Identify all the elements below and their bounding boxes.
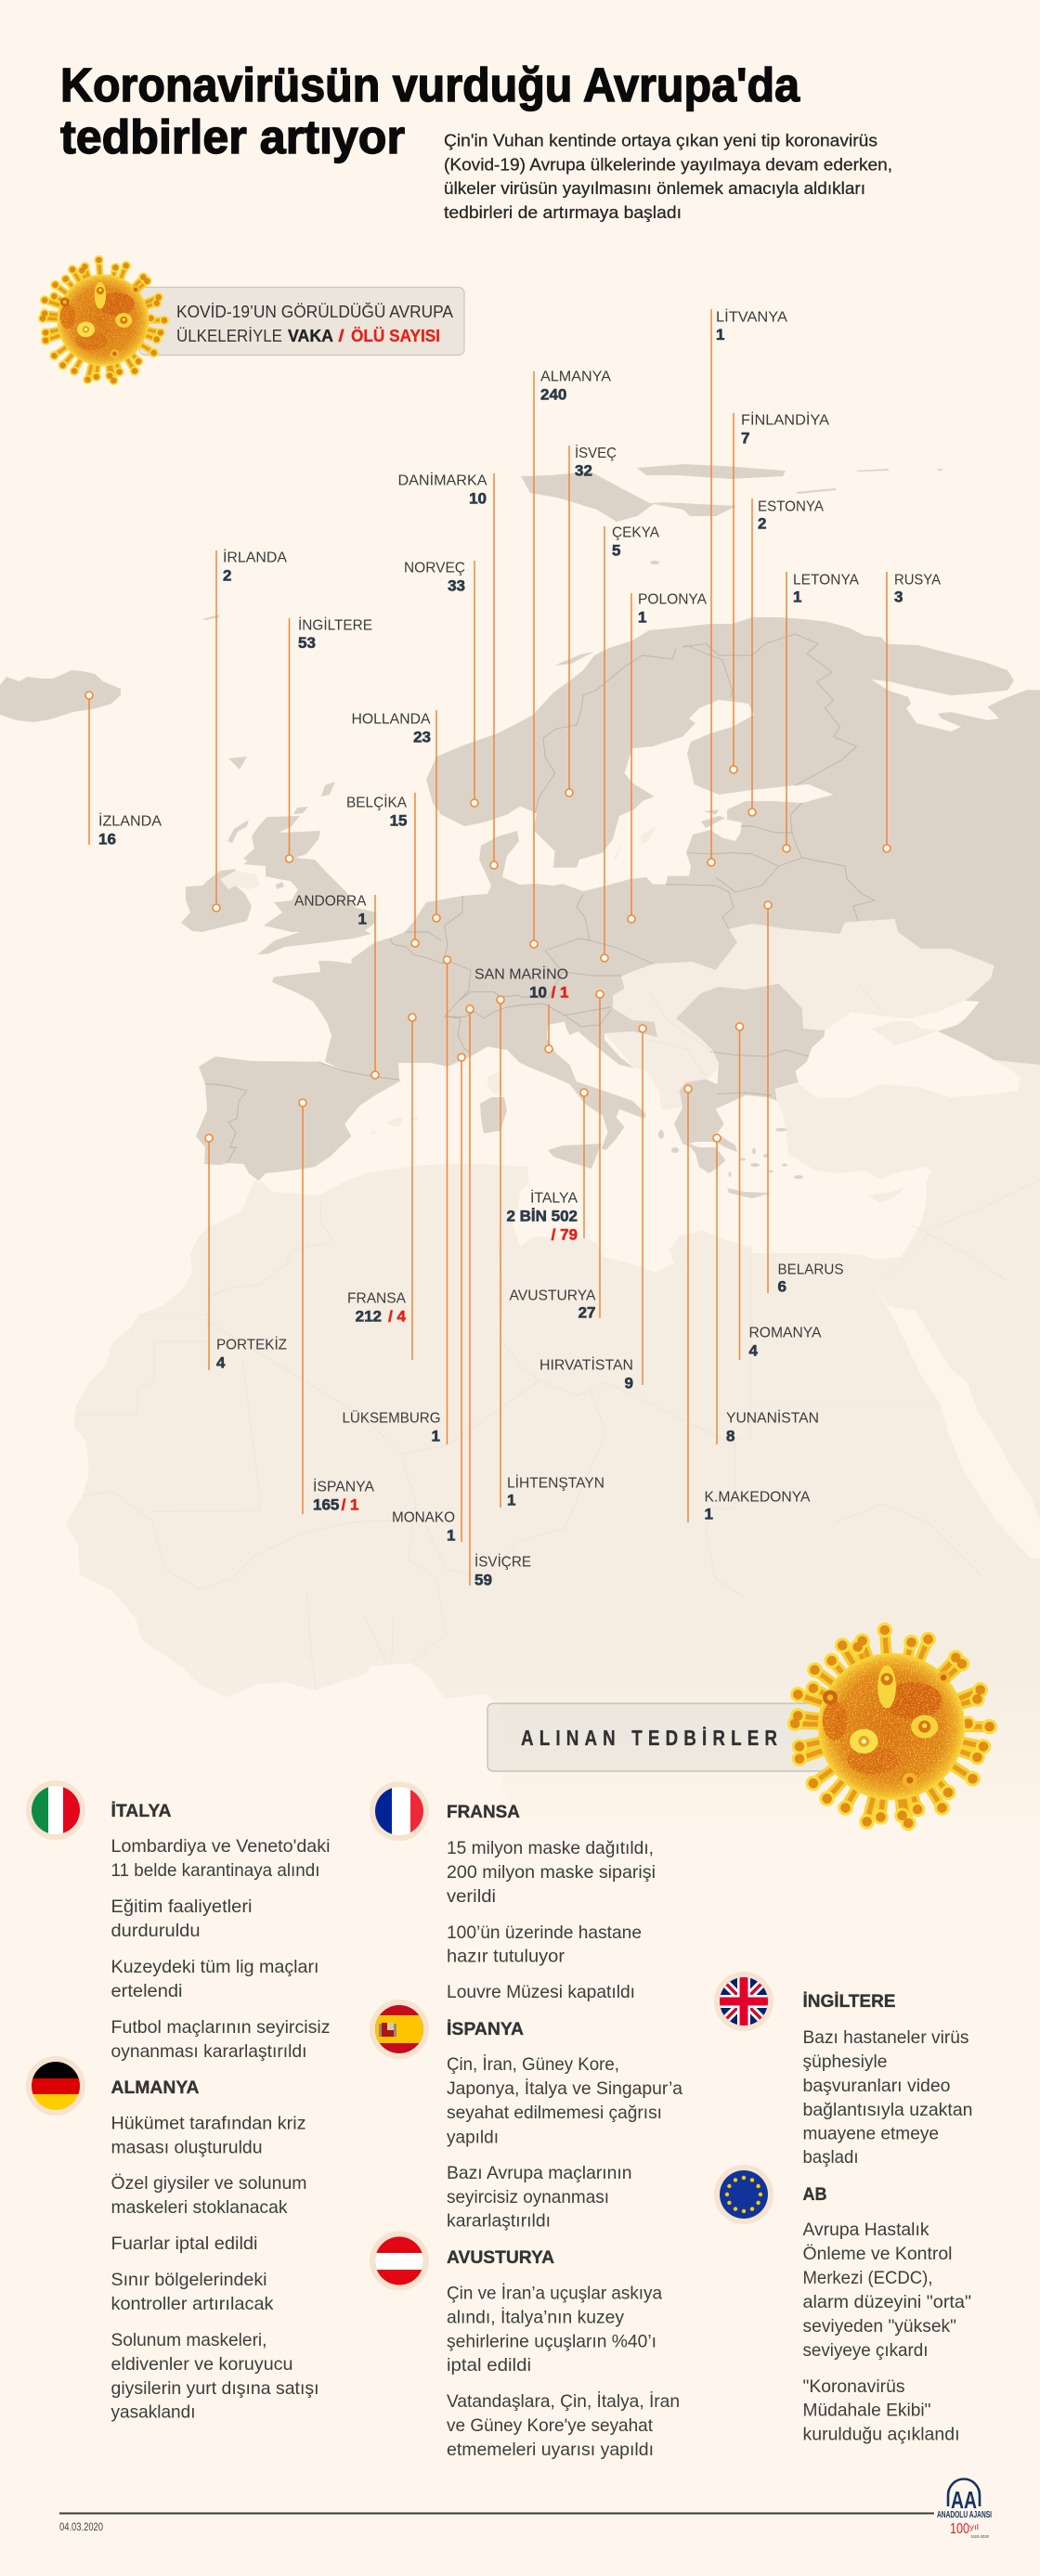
- country: San Marino: 10: [529, 984, 547, 1001]
- country: Çekya: ÇEKYA: [612, 525, 660, 540]
- country: Lüksemburg: LÜKSEMBURG: [342, 1409, 440, 1426]
- country: Çekya: [601, 525, 660, 962]
- measures: Germany: ALMANYA: [111, 2078, 200, 2098]
- measures: Austria: alındı, İtalya’nın kuzey: [447, 2306, 624, 2328]
- country: Andorra: [294, 893, 379, 1079]
- sea: Red Sea: [872, 1280, 1040, 1559]
- country: Avusturya: [509, 990, 604, 1322]
- map of Europe and North Africa: [0, 464, 1040, 1819]
- country: Yunanistan: [713, 1134, 819, 1444]
- country: Polonya: 1: [638, 609, 646, 626]
- measures: Spain: Bazı Avrupa maçlarının: [447, 2163, 631, 2183]
- panel: map legend: VAKA: [288, 326, 333, 345]
- measures: Austria: [447, 2248, 680, 2460]
- country: Hollanda: [351, 710, 440, 922]
- measures: European Union: Merkezi (ECDC),: [802, 2268, 932, 2288]
- country: İsviçre: [466, 1005, 531, 1589]
- panel: map legend: ÖLÜ SAYISI: [351, 326, 440, 345]
- country: Belarus: [764, 901, 843, 1296]
- country: İzlanda: 16: [98, 830, 116, 848]
- panel: map legend: ÜLKELERİYLE: [176, 326, 282, 345]
- country: San Marino: SAN MARİNO: [474, 965, 568, 982]
- country: Finlandiya: [730, 412, 830, 773]
- measures: United Kingdom: başladı: [802, 2147, 858, 2168]
- measures: Austria: ve Güney Kore'ye seyahat: [447, 2415, 654, 2436]
- intro text: tedbirleri de artırmaya başladı: [444, 202, 682, 222]
- measures: Germany: Özel giysiler ve solunum: [111, 2173, 306, 2194]
- country: Norveç: 33: [448, 577, 465, 594]
- measures: European Union: "Koronavirüs: [802, 2376, 905, 2397]
- country: İspanya: [299, 1099, 375, 1514]
- measures: Spain: Çin, İran, Güney Kore,: [447, 2053, 619, 2075]
- measures: Spain: seyircisiz oynanması: [447, 2187, 609, 2207]
- country: Andorra: 1: [358, 910, 367, 928]
- measures: Germany: Fuarlar iptal edildi: [111, 2233, 258, 2254]
- measures: Italy: ertelendi: [111, 1981, 182, 2001]
- measures: Austria: Çin ve İran’a uçuşlar askıya: [447, 2282, 662, 2304]
- measures: France: hazır tutuluyor: [447, 1946, 566, 1966]
- country: Danimarka: [397, 472, 498, 869]
- measures: United Kingdom: muayene etmeye: [802, 2124, 939, 2144]
- measures: France: 100’ün üzerinde hastane: [447, 1922, 642, 1943]
- measures: Germany: yasaklandı: [111, 2402, 195, 2423]
- measures: Spain: [447, 2020, 682, 2232]
- landmass: Crimea: [872, 1021, 940, 1045]
- measures: Germany: kontroller artırılacak: [111, 2294, 274, 2314]
- measures: Spain: seyahat edilmemesi çağrısı: [447, 2103, 662, 2123]
- country: Hırvatistan: 9: [625, 1374, 633, 1392]
- country: K.Makedonya: K.MAKEDONYA: [704, 1489, 811, 1506]
- intro text: ülkeler virüsün yayılmasını önlemek amacıyla aldıkları: [444, 178, 865, 198]
- country: Avusturya: 27: [578, 1303, 596, 1322]
- country: Estonya: [748, 498, 825, 816]
- country: Fransa: / 4: [388, 1307, 407, 1326]
- measures: Austria: Vatandaşlara, Çin, İtalya, İran: [447, 2390, 680, 2412]
- country: Rusya: 3: [894, 589, 903, 605]
- measures: Germany: giysilerin yurt dışına satışı: [111, 2378, 319, 2399]
- country: Litvanya: [708, 308, 788, 866]
- country: Almanya: 240: [540, 386, 566, 403]
- measures: Germany: eldivenler ve koruyucu: [111, 2354, 293, 2375]
- country: Almanya: [530, 369, 612, 948]
- landmass: Iceland: [0, 670, 121, 722]
- country: Almanya: ALMANYA: [540, 369, 612, 384]
- country: Portekiz: PORTEKİZ: [216, 1337, 287, 1353]
- country: Estonya: 2: [758, 514, 766, 533]
- icon: virus top: [43, 260, 164, 381]
- intro text: Çin'in Vuhan kentinde ortaya çıkan yeni tip koronavirüs: [444, 130, 878, 150]
- measures: France: 15 milyon maske dağıtıldı,: [447, 1838, 654, 1858]
- intro text: [444, 130, 892, 222]
- country: Fransa: 212: [356, 1307, 382, 1326]
- country: Polonya: POLONYA: [638, 592, 708, 607]
- measures: Italy: Eğitim faaliyetleri: [111, 1896, 253, 1917]
- measures: Italy: oynanması kararlaştırıldı: [111, 2041, 306, 2062]
- measures: France: [447, 1803, 656, 2002]
- country: Lihtenştayn: [497, 996, 604, 1509]
- country: Lüksemburg: 1: [432, 1428, 440, 1444]
- measures: Spain: Japonya, İtalya ve Singapur’a: [447, 2078, 682, 2099]
- measures: Germany: Sınır bölgelerindeki: [111, 2270, 267, 2290]
- islands: light coloured: [370, 826, 906, 1203]
- measures: European Union: Müdahale Ekibi": [802, 2401, 931, 2421]
- measures: United Kingdom: Bazı hastaneler virüs: [802, 2027, 969, 2048]
- country: Belarus: BELARUS: [778, 1262, 843, 1277]
- measures: European Union: Önleme ve Kontrol: [802, 2244, 953, 2264]
- country: Çekya: 5: [612, 542, 620, 559]
- country: Finlandiya: 7: [741, 429, 749, 447]
- measures: United Kingdom: şüphesiyle: [802, 2052, 888, 2072]
- landmass: eastern Balkans and Greece: [674, 984, 826, 1173]
- country: K.Makedonya: 1: [704, 1506, 713, 1522]
- measures: European Union: AB: [802, 2185, 826, 2205]
- country: İsviçre: 59: [474, 1571, 492, 1589]
- country: Norveç: [404, 561, 478, 807]
- measures: Italy: durduruldu: [111, 1921, 201, 1941]
- country: Hırvatistan: [540, 1025, 646, 1392]
- icon: virus bottom: [795, 1630, 990, 1823]
- country: San Marino: [474, 965, 568, 1053]
- measures: Spain: İSPANYA: [447, 2020, 524, 2039]
- country: Lihtenştayn: LİHTENŞTAYN: [507, 1474, 604, 1491]
- logo: Anadolu Ajansı: yıl: [969, 2523, 979, 2531]
- panel: measures heading: [488, 1703, 831, 1771]
- panel: map legend: KOVİD-19’UN GÖRÜLDÜĞÜ AVRUPA: [176, 302, 454, 321]
- measures: European Union: seviyeye çıkardı: [802, 2340, 929, 2361]
- country: Monako: 1: [447, 1526, 455, 1545]
- landmass: Northern Ireland: [220, 871, 260, 889]
- country borders: Europe: [205, 634, 875, 1162]
- country: İspanya: 165: [313, 1496, 339, 1513]
- measures: France: FRANSA: [447, 1803, 520, 1822]
- logo: Anadolu Ajansı: 100: [950, 2521, 969, 2537]
- country: İsveç: 32: [575, 462, 592, 479]
- country: Litvanya: LİTVANYA: [716, 308, 788, 325]
- measures: United Kingdom: başvuranları video: [802, 2076, 951, 2096]
- measures: France: 200 milyon maske siparişi: [447, 1862, 656, 1883]
- country: İsveç: İSVEÇ: [575, 445, 617, 461]
- measures: Spain: kararlaştırıldı: [447, 2211, 551, 2232]
- measures: Italy: Lombardiya ve Veneto'daki: [111, 1836, 331, 1857]
- date: 04.03.2020: [59, 2520, 103, 2533]
- measures: Germany: Hükümet tarafından kriz: [111, 2113, 306, 2133]
- measures: United Kingdom: bağlantısıyla uzaktan: [802, 2100, 973, 2120]
- title: [60, 58, 800, 163]
- country: İzlanda: İZLANDA: [98, 813, 162, 830]
- country: İrlanda: [213, 550, 288, 912]
- country: Fransa: [347, 1014, 416, 1360]
- landmass: Africa and Middle East: [66, 1060, 1040, 1819]
- landmass: Iberian peninsula: [196, 1056, 401, 1181]
- country: İspanya: / 1: [342, 1496, 358, 1513]
- measures: United Kingdom: [802, 1992, 973, 2168]
- country: Portekiz: 4: [216, 1353, 226, 1372]
- flag: Spain: [370, 2000, 429, 2059]
- measures: Germany: Solunum maskeleri,: [111, 2330, 267, 2350]
- country: İspanya: İSPANYA: [313, 1478, 375, 1495]
- country: Hollanda: 23: [413, 728, 431, 746]
- country: Lihtenştayn: 1: [507, 1491, 515, 1509]
- measures: Italy: Futbol maçlarının seyircisiz: [111, 2017, 331, 2038]
- title: tedbirler artıyor: [60, 110, 405, 163]
- country: Belçika: 15: [390, 811, 407, 830]
- country: Romanya: [735, 1023, 822, 1360]
- country: Finlandiya: FİNLANDİYA: [741, 412, 830, 429]
- landmass: Great Britain: [243, 816, 376, 954]
- country: Polonya: [628, 592, 708, 923]
- country: İtalya: 2 BİN 502: [506, 1207, 578, 1225]
- flag: Italy: [26, 1780, 85, 1840]
- country: İsveç: [566, 445, 617, 796]
- country: İtalya: İTALYA: [530, 1190, 578, 1207]
- measures: Austria: şehirlerine uçuşların %40’ı: [447, 2332, 656, 2352]
- country: Hırvatistan: HIRVATİSTAN: [540, 1357, 633, 1374]
- title: Koronavirüsün vurduğu Avrupa'da: [60, 58, 800, 111]
- country: İngiltere: 53: [298, 634, 316, 652]
- country: İtalya: / 79: [552, 1225, 578, 1244]
- country: Letonya: LETONYA: [793, 572, 860, 589]
- country: İngiltere: İNGİLTERE: [298, 616, 372, 633]
- flag: France: [370, 1781, 429, 1841]
- country: Belçika: [346, 793, 419, 947]
- landmass: Ireland: [181, 869, 252, 932]
- country: K.Makedonya: [684, 1085, 811, 1522]
- landmass: mainland Europe, Scandinavia and Russia: [272, 617, 1040, 1150]
- logo: Anadolu Ajansı: 1920-2020: [970, 2534, 989, 2539]
- measures: European Union: [802, 2185, 971, 2445]
- logo: Anadolu Ajansı: [937, 2479, 992, 2539]
- country: Letonya: 1: [793, 589, 801, 605]
- measures: Italy: İTALYA: [111, 1802, 172, 1821]
- country: Andorra: ANDORRA: [294, 893, 367, 910]
- sea: Azov: [911, 1001, 980, 1030]
- logo: Anadolu Ajansı: AA: [951, 2486, 977, 2514]
- country: Belçika: BELÇİKA: [346, 795, 408, 811]
- panel: measures heading: ALINAN TEDBİRLER: [521, 1726, 777, 1751]
- logo: Anadolu Ajansı: ANADOLU AJANSI: [937, 2510, 992, 2520]
- flag: European Union: [714, 2165, 774, 2224]
- country borders: Africa, Balkans and Middle East: [74, 984, 1040, 1689]
- measures: France: Louvre Müzesi kapatıldı: [447, 1982, 635, 2002]
- measures: Italy: 11 belde karantinaya alındı: [111, 1860, 319, 1881]
- country: San Marino: / 1: [552, 984, 568, 1001]
- measures: France: verildi: [447, 1886, 496, 1907]
- measures: European Union: seviyeden "yüksek": [802, 2316, 956, 2337]
- measures: Italy: Kuzeydeki tüm lig maçları: [111, 1957, 319, 1977]
- islands: Mediterranean and North Atlantic: [202, 615, 803, 1198]
- country: Estonya: ESTONYA: [758, 499, 825, 514]
- measures: Austria: iptal edildi: [447, 2355, 531, 2375]
- country: İsviçre: İSVİÇRE: [474, 1554, 531, 1571]
- landmass: Svalbard: [521, 464, 942, 564]
- country: Romanya: ROMANYA: [748, 1326, 822, 1340]
- country: Yunanistan: 8: [726, 1428, 734, 1444]
- country: Letonya: [783, 572, 860, 852]
- country: Rusya: [883, 572, 942, 852]
- panel: map legend: /: [338, 326, 344, 345]
- country: Norveç: NORVEÇ: [404, 561, 465, 576]
- country: Belarus: 6: [778, 1277, 786, 1296]
- country: Fransa: FRANSA: [347, 1290, 407, 1307]
- measures: Germany: maskeleri stoklanacak: [111, 2197, 288, 2218]
- country: İrlanda: İRLANDA: [223, 550, 288, 566]
- country: Monako: MONAKO: [392, 1509, 455, 1526]
- measures: Spain: yapıldı: [447, 2128, 499, 2148]
- country: İngiltere: [286, 616, 372, 862]
- flag: Germany: [26, 2056, 85, 2116]
- country: İtalya: [506, 1089, 588, 1244]
- country: İzlanda: [85, 692, 162, 848]
- measures: European Union: alarm düzeyini "orta": [802, 2292, 971, 2312]
- measures: Austria: AVUSTURYA: [447, 2248, 554, 2268]
- country: İrlanda: 2: [223, 566, 231, 585]
- panel: map legend: [139, 288, 464, 355]
- measures: United Kingdom: İNGİLTERE: [802, 1992, 895, 2012]
- country: Avusturya: AVUSTURYA: [509, 1288, 596, 1303]
- country: Portekiz: [205, 1134, 287, 1372]
- country: Danimarka: DANİMARKA: [397, 472, 488, 488]
- measures: Germany: masası oluşturuldu: [111, 2137, 262, 2157]
- flag: United Kingdom: [714, 1972, 774, 2031]
- country: Monako: [392, 1054, 465, 1545]
- country: Lüksemburg: [342, 956, 451, 1444]
- measures: Austria: etmemeleri uyarısı yapıldı: [447, 2440, 654, 2460]
- intro text: (Kovid-19) Avrupa ülkelerinde yayılmaya devam ederken,: [444, 154, 892, 175]
- country: Hollanda: HOLLANDA: [351, 711, 431, 728]
- flag: Austria: [370, 2232, 429, 2291]
- measures: Italy: [111, 1802, 331, 2062]
- measures: European Union: kurulduğu açıklandı: [802, 2425, 960, 2445]
- footer rule: [59, 2512, 934, 2514]
- country: Romanya: 4: [748, 1342, 758, 1359]
- country: Danimarka: 10: [469, 490, 487, 507]
- landmass: Ukraine, Hungary, Slovakia and western Balkans: [604, 919, 994, 1110]
- country: Litvanya: 1: [716, 326, 724, 343]
- country: Rusya: RUSYA: [894, 572, 942, 589]
- country: Yunanistan: YUNANİSTAN: [726, 1409, 819, 1426]
- measures: European Union: Avrupa Hastalık: [802, 2220, 930, 2240]
- measures: Germany: [111, 2078, 319, 2423]
